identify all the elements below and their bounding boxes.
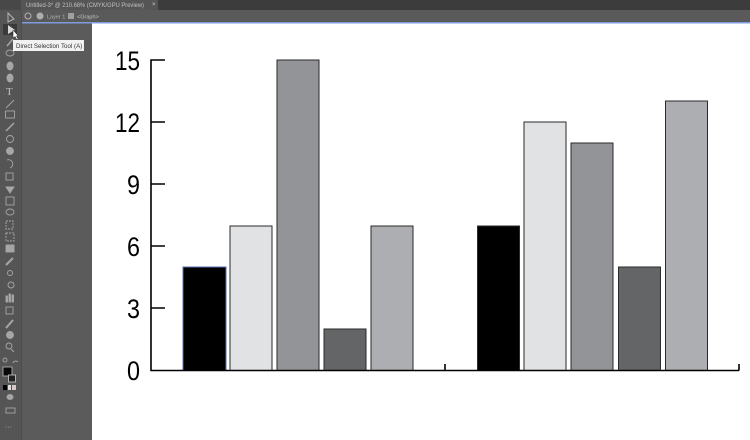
y axis labels: 0 <box>127 356 140 386</box>
y axis labels <box>115 46 140 386</box>
top tab bar: × <box>152 2 156 8</box>
icon: selection tool <box>8 13 14 22</box>
bar chart <box>115 46 739 386</box>
group 1 bars <box>183 60 413 370</box>
breadcrumb bar: Layer 1 <box>47 14 65 20</box>
left tools panel <box>0 10 22 440</box>
top tab bar <box>0 0 750 10</box>
y axis labels: 9 <box>127 170 140 200</box>
icon: cursor <box>13 30 18 40</box>
text tool: T <box>6 86 13 98</box>
y axis labels: 6 <box>127 232 140 262</box>
top tab bar: Untitled-3* @ 210.68% (CMYK/GPU Preview) <box>26 3 144 9</box>
icon group: tool column <box>3 39 18 413</box>
y axis labels: 15 <box>115 46 140 76</box>
axes and ticks <box>151 60 739 370</box>
more tools: ··· <box>5 424 12 431</box>
breadcrumb bar <box>0 10 750 24</box>
y axis labels: 3 <box>127 294 140 324</box>
tooltip: direct selection tool: Direct Selection Tool (A) <box>16 43 82 50</box>
group 2 bars <box>478 101 708 370</box>
breadcrumb bar: <Graph> <box>77 14 99 20</box>
fill and stroke swatches <box>3 367 16 390</box>
icon: direct selection tool active <box>3 24 17 35</box>
y axis labels: 12 <box>115 108 140 138</box>
tooltip: direct selection tool <box>13 40 84 51</box>
